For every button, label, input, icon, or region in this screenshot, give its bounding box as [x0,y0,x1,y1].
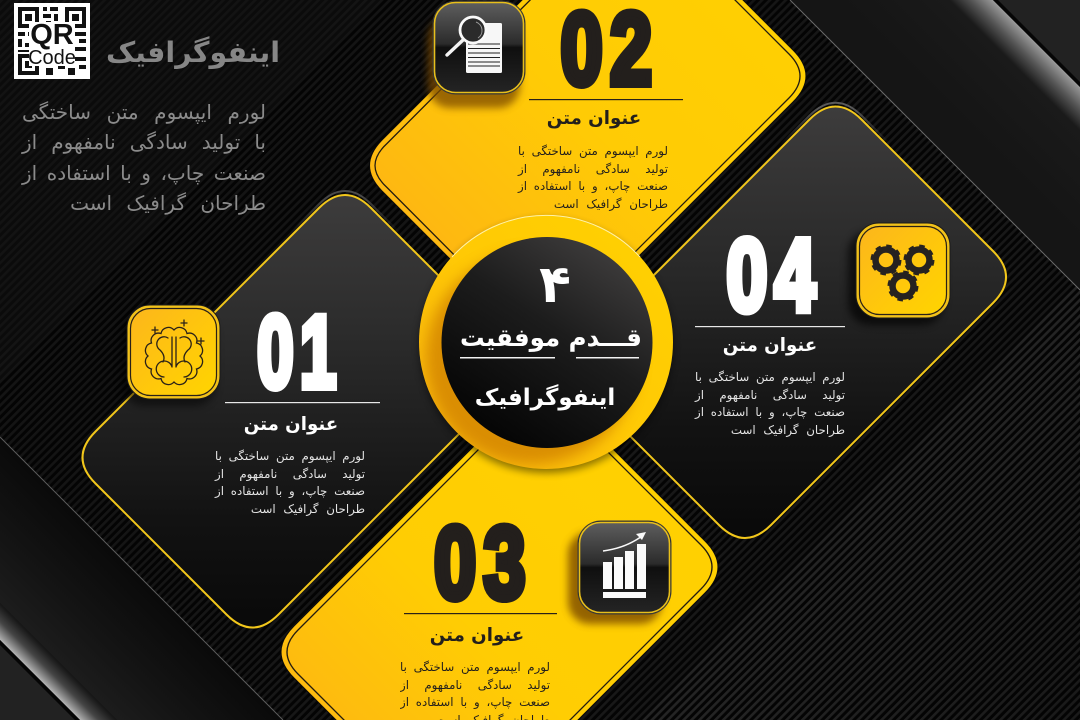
numeral 4: ۴ [539,255,571,315]
body text 04 [694,370,845,437]
QR code: Code [28,47,76,69]
divider 04 [695,326,845,327]
badge shadow [419,219,673,473]
number 04: 04 [726,219,823,332]
panel 01 top edge highlight [290,191,400,233]
panel 03 inner outline [287,397,712,720]
title 02: عنوان متن [547,108,641,129]
intro paragraph: صنعت چاپ، و با استفاده از [22,161,266,185]
panel 04 shape [574,106,1006,538]
body text 04: طراحان گرافیک است [731,423,845,437]
intro paragraph: با تولید سادگی نامفهوم از [22,130,266,154]
body text 01: لورم ایپسوم متن ساختگی با [215,449,365,463]
badge disc [442,237,652,448]
panel 04 top edge highlight [780,103,890,145]
ring shade [426,252,638,464]
QR code: QR [30,19,74,51]
ring highlight [452,215,640,257]
body text 01: تولید سادگی نامفهوم از [215,467,365,481]
title 04: عنوان متن [723,335,817,356]
body text 01 [214,449,365,516]
body text 02: لورم ایپسوم متن ساختگی با [518,144,668,158]
intro paragraph: طراحان گرافیک است [70,191,266,215]
panel 01 shape [82,195,515,628]
body text 02: تولید سادگی نامفهوم از [518,162,668,176]
divider 03 [404,613,557,614]
title 01: عنوان متن [244,414,338,435]
panel 02 shape [370,0,806,339]
panel 03 shape [281,391,718,720]
badge subheading: اینفوگرافیک [475,385,615,411]
number 03: 03 [434,507,533,621]
body text 03: لورم ایپسوم متن ساختگی با [400,660,550,674]
center badge: 4 steps of success [418,214,673,478]
divider 02 [529,99,683,100]
badge heading: قـــدم موفقیت [460,323,642,352]
intro paragraph [21,100,266,215]
body text 02 [518,144,668,211]
body text 03: صنعت چاپ، و با استفاده از [400,695,550,709]
panel 02: yellow diamond with search icon [369,0,806,259]
body text 04: صنعت چاپ، و با استفاده از [695,405,845,419]
body text 01: طراحان گرافیک است [251,502,365,516]
body text 02: طراحان گرافیک است [554,197,668,211]
panel 03: yellow diamond with chart icon [280,446,718,720]
heading: اینفوگرافیک [106,36,280,69]
icon: gears [848,223,950,325]
intro paragraph: لورم ایپسوم متن ساختگی [22,100,266,124]
panel 01: dark diamond with brain icon [81,190,460,628]
body text 04: تولید سادگی نامفهوم از [695,388,845,402]
body text 03 [400,660,550,720]
panel 02 inner outline [375,0,800,333]
body text 02: صنعت چاپ، و با استفاده از [518,179,668,193]
body text 01: صنعت چاپ، و با استفاده از [215,484,365,498]
underline right [576,357,639,358]
panel 04: dark diamond with gears icon [630,102,1008,539]
number 01: 01 [257,295,343,410]
icon: magnifier over document [428,1,525,108]
badge ring [419,215,673,469]
QR code [14,3,90,79]
icon: growth chart [568,521,671,624]
title 03: عنوان متن [430,625,524,646]
icon: brain [122,305,220,406]
body text 04: لورم ایپسوم متن ساختگی با [695,370,845,384]
body text 03: تولید سادگی نامفهوم از [400,678,550,692]
underline left [460,357,555,358]
divider 01 [225,402,380,403]
